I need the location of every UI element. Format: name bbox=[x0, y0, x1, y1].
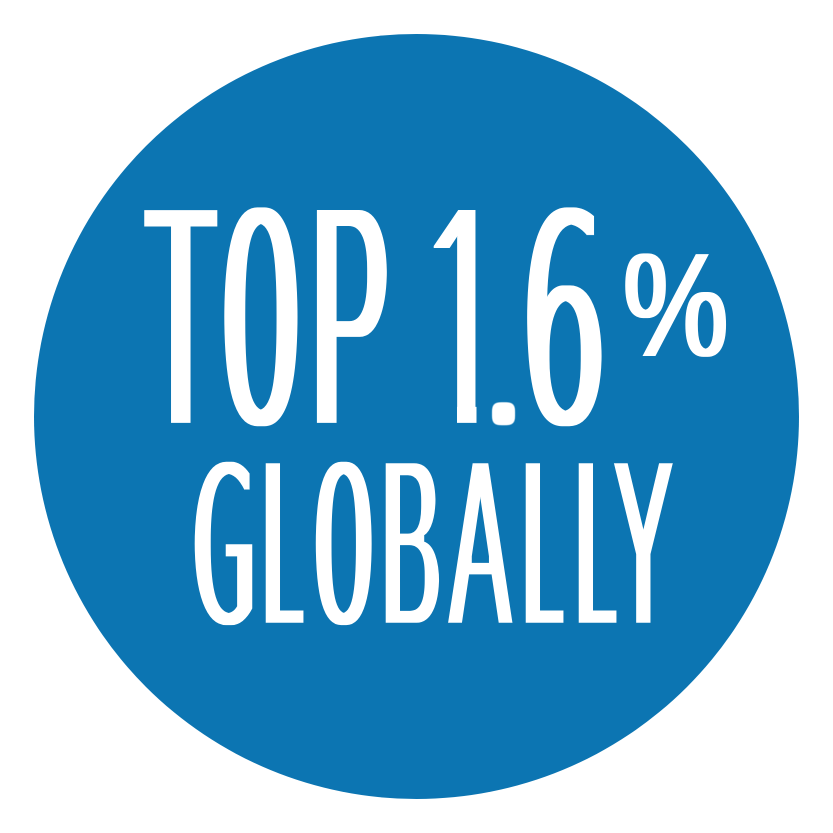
subheading: GLOBALLY: G bbox=[192, 418, 257, 679]
subheading: GLOBALLY bbox=[192, 407, 673, 679]
subheading: GLOBALLY: Y bbox=[614, 410, 673, 677]
headline: TOP 1.6%: % bbox=[623, 223, 728, 388]
subheading: GLOBALLY: A bbox=[450, 407, 511, 677]
subheading: GLOBALLY: O bbox=[312, 419, 375, 679]
subheading: GLOBALLY: L bbox=[577, 409, 615, 678]
subheading: GLOBALLY: B bbox=[381, 410, 441, 678]
headline: TOP 1.6%: T bbox=[146, 138, 215, 496]
subheading: GLOBALLY: L bbox=[264, 409, 302, 678]
headline: TOP 1.6% bbox=[144, 207, 726, 426]
headline: TOP 1.6%: 1 bbox=[422, 138, 506, 496]
headline: TOP 1.6%: . bbox=[483, 167, 524, 491]
headline: TOP 1.6%: O bbox=[220, 148, 302, 497]
subheading: GLOBALLY: L bbox=[524, 409, 562, 678]
headline: TOP 1.6%: 6 bbox=[521, 149, 607, 497]
headline: TOP 1.6%: P bbox=[312, 138, 388, 496]
